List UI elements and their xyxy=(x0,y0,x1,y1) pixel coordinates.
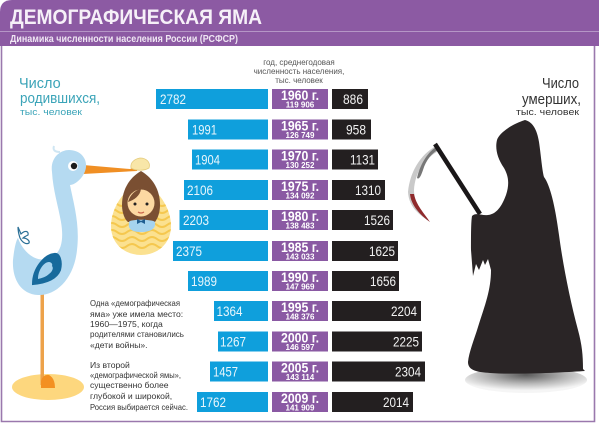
row 1965: 1965 г. xyxy=(281,118,319,134)
row 2000: 1267 xyxy=(220,334,246,350)
row 1995: 2204 xyxy=(391,303,417,319)
row 1985: 2375 xyxy=(176,243,202,259)
row 1990: 1656 xyxy=(370,273,396,289)
label: deaths: тыс. человек xyxy=(516,107,580,118)
row 1985: 1985 г. xyxy=(281,239,319,255)
row 1990: 1989 xyxy=(191,273,217,289)
label: births: родившихся, xyxy=(20,91,100,107)
row 1970 xyxy=(192,148,378,170)
row 2000: 2000 г. xyxy=(281,330,319,346)
row 1995: 1995 г. xyxy=(281,299,319,315)
row 1975: 1975 г. xyxy=(281,178,319,194)
row 1995: 1364 xyxy=(216,303,243,319)
row 1965: 958 xyxy=(346,122,366,138)
row 2005 xyxy=(210,360,425,382)
row 1995: 148 376 xyxy=(286,312,315,322)
row 1985: 143 033 xyxy=(286,252,315,262)
row 2000 xyxy=(218,330,422,352)
row 1970: 1904 xyxy=(195,152,220,168)
row 1965: 1991 xyxy=(192,122,217,138)
table: births, year, deaths xyxy=(156,87,425,412)
row 1960 xyxy=(156,87,368,110)
row 2005: 1457 xyxy=(213,364,238,380)
text block: explanation: Из второй xyxy=(90,360,130,370)
column caption: численность населения, xyxy=(254,67,344,76)
column caption: тыс. человек xyxy=(275,76,323,85)
text block: explanation: родителями становились xyxy=(90,329,184,339)
label: births xyxy=(19,76,100,118)
row 1965 xyxy=(188,118,371,140)
row 2000: 146 597 xyxy=(286,343,315,352)
icon: baby in bundle xyxy=(111,158,171,255)
column caption: год, среднегодовая xyxy=(263,58,335,67)
row 1975 xyxy=(184,178,385,200)
header band xyxy=(0,0,599,46)
row 1980 xyxy=(180,208,393,230)
row 2009: 2009 г. xyxy=(281,390,319,406)
row 1980: 1980 г. xyxy=(281,208,319,224)
row 1965: 126 749 xyxy=(286,131,315,140)
icon: grim reaper xyxy=(408,120,587,393)
label: deaths: умерших, xyxy=(522,92,581,108)
label: births: тыс. человек xyxy=(20,107,83,118)
row 2009 xyxy=(197,390,413,412)
row 1960: 1960 г. xyxy=(281,87,319,103)
text block: explanation: глубокой и широкой, xyxy=(90,391,172,401)
column caption xyxy=(254,58,344,85)
row 2005: 2005 г. xyxy=(281,360,319,376)
row 1985: 1625 xyxy=(369,243,395,259)
text block: explanation: яма» уже имела место: xyxy=(90,309,183,319)
text block: explanation: существенно более xyxy=(90,380,169,390)
text block: explanation: Россия выбирается сейчас. xyxy=(90,402,188,412)
row 1970: 1131 xyxy=(350,152,375,168)
row 1960: 2782 xyxy=(160,91,186,107)
row 1960: 119 906 xyxy=(286,100,315,110)
row 1960: 886 xyxy=(343,91,363,107)
row 1995 xyxy=(214,299,421,322)
label: births: Число xyxy=(19,76,61,92)
row 1975: 1310 xyxy=(355,182,381,198)
row 1980: 2203 xyxy=(183,212,209,228)
text block: explanation: «демографической ямы», xyxy=(90,370,181,380)
text block: explanation: Одна «демографическая xyxy=(90,298,180,308)
label: deaths xyxy=(516,76,581,118)
text block: explanation: 1960—1975, когда xyxy=(90,319,163,329)
label: deaths: Число xyxy=(542,76,579,92)
row 2009: 1762 xyxy=(200,394,226,410)
row 1980: 1526 xyxy=(364,212,390,228)
row 2005: 143 114 xyxy=(286,373,315,382)
row 1970: 1970 г. xyxy=(281,148,319,164)
row 1975: 134 092 xyxy=(286,192,315,200)
text block: explanation: «дети войны». xyxy=(90,340,148,350)
row 1975: 2106 xyxy=(187,182,213,198)
row 2005: 2304 xyxy=(395,364,421,380)
row 2000: 2225 xyxy=(393,334,419,350)
row 2009: 141 909 xyxy=(286,404,315,412)
row 1990: 1990 г. xyxy=(281,269,319,285)
row 2009: 2014 xyxy=(383,394,409,410)
subtitle: Динамика численности населения России (РСФСР) xyxy=(10,34,238,45)
row 1990 xyxy=(188,269,399,292)
row 1985 xyxy=(173,239,398,262)
row 1990: 147 969 xyxy=(286,282,315,292)
row 1970: 130 252 xyxy=(286,161,315,170)
text block: explanation xyxy=(90,298,188,412)
title: ДЕМОГРАФИЧЕСКАЯ ЯМА xyxy=(10,6,262,29)
row 1980: 138 483 xyxy=(286,222,315,230)
icon: stork xyxy=(12,146,138,400)
